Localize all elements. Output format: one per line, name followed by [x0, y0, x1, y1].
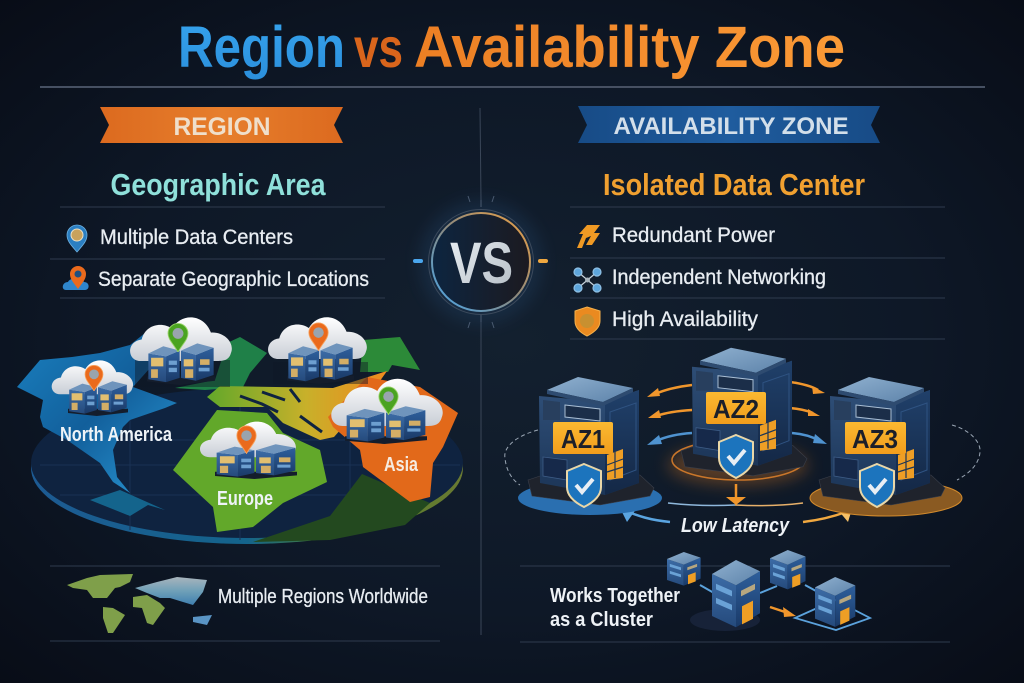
- icon: small world map: [67, 574, 212, 633]
- cluster diagram: [667, 550, 870, 631]
- icon: data center pin: [67, 225, 87, 252]
- text: separate geographic locations: Separate Geographic Locations: [98, 268, 369, 291]
- icon: lightning: [577, 225, 600, 248]
- text: redundant power: Redundant Power: [612, 224, 775, 247]
- map disc: [31, 388, 463, 544]
- title: Region: [178, 15, 345, 80]
- dashed orbit: right: [952, 425, 980, 480]
- banner: region: REGION: [174, 113, 270, 141]
- continent: europe: [173, 410, 327, 532]
- arrows between zones: [626, 382, 846, 522]
- text: works together as a cluster: Works Together: [550, 585, 680, 607]
- icon: geographic location pin: [63, 266, 89, 290]
- title: vs: [354, 16, 403, 79]
- text: high availability: High Availability: [612, 308, 758, 331]
- text: multiple regions worldwide: Multiple Regions Worldwide: [218, 586, 428, 608]
- label: low latency: Low Latency: [681, 515, 790, 537]
- banner: availability zone: AVAILABILITY ZONE: [614, 113, 848, 140]
- continent: asia: [328, 377, 458, 502]
- world map: [17, 317, 463, 544]
- data center: north america: [52, 360, 133, 416]
- zone: az1: [518, 377, 662, 515]
- banner: region: [100, 107, 343, 143]
- building shadows: [135, 360, 368, 387]
- icon: orange shield: [575, 307, 600, 336]
- heading: geographic area: Geographic Area: [110, 167, 326, 202]
- banner: availability zone: [578, 106, 880, 143]
- zone: az2: [668, 348, 808, 485]
- vs badge: VS: [450, 231, 513, 296]
- title: Availability Zone: [414, 15, 845, 80]
- continent: greenland: [175, 337, 267, 390]
- continent: northern asia: [360, 337, 420, 372]
- inland seas: [240, 389, 322, 432]
- zone: az2: AZ2: [713, 394, 759, 424]
- vs badge: [413, 196, 548, 328]
- data center: europe: [200, 422, 297, 479]
- label: north america: North America: [60, 424, 173, 446]
- continent: north america: [17, 333, 177, 516]
- zone: az3: AZ3: [852, 424, 898, 454]
- label: asia: Asia: [384, 454, 419, 476]
- data center: north: [130, 317, 232, 385]
- icon: network: [574, 268, 601, 292]
- text: works together as a cluster: [550, 585, 680, 631]
- zone: az3: [810, 377, 962, 516]
- text: multiple data centers: Multiple Data Centers: [100, 226, 293, 249]
- text: independent networking: Independent Networking: [612, 266, 826, 289]
- label: europe: Europe: [217, 488, 273, 510]
- zone: az1: AZ1: [561, 424, 605, 454]
- availability zones: [505, 348, 980, 537]
- heading: isolated data center: Isolated Data Center: [603, 167, 865, 202]
- continent: southern green: [253, 474, 430, 542]
- title: [178, 15, 845, 80]
- text: works together as a cluster: as a Cluster: [550, 609, 653, 631]
- data center: east: [268, 317, 367, 384]
- dashed orbit: left: [505, 430, 538, 485]
- data center: asia: [331, 379, 443, 444]
- continent: central band: [207, 371, 387, 440]
